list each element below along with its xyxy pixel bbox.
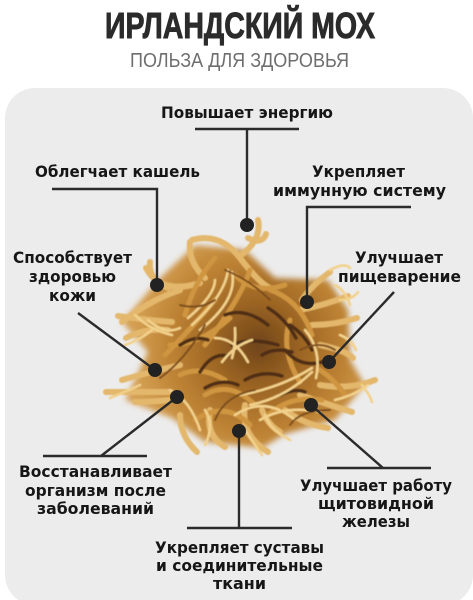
label: joints: и соединительные xyxy=(156,556,323,575)
label: thyroid xyxy=(300,398,453,531)
label: immune system xyxy=(273,162,447,309)
image: irish moss xyxy=(106,220,375,455)
label: skin: Способствует xyxy=(13,248,133,267)
label: skin: здоровью xyxy=(29,267,116,286)
label: thyroid: щитовидной xyxy=(318,494,434,513)
label: joints: Укрепляет суставы xyxy=(155,538,324,557)
subtitle: ПОЛЬЗА ДЛЯ ЗДОРОВЬЯ xyxy=(130,50,349,72)
title: ИРЛАНДСКИЙ МОХ xyxy=(105,4,375,46)
label: joints xyxy=(155,424,324,593)
label: skin xyxy=(13,248,162,377)
label: skin: кожи xyxy=(49,286,96,305)
label: joints: ткани xyxy=(213,574,266,593)
label: energy: Повышает энергию xyxy=(161,103,333,122)
label: cough: Облегчает кашель xyxy=(35,162,200,181)
label: cough xyxy=(35,162,200,292)
label: recovery xyxy=(19,390,184,518)
label: immune system: Укрепляет xyxy=(312,162,406,181)
label: digestion: пищеварение xyxy=(338,267,461,286)
label: digestion xyxy=(322,248,461,369)
label: recovery: Восстанавливает xyxy=(19,462,173,481)
label: digestion: Улучшает xyxy=(355,248,444,267)
label: energy xyxy=(161,103,333,232)
label: immune system: иммунную систему xyxy=(273,181,447,200)
label: recovery: организм после xyxy=(25,481,166,500)
label: recovery: заболеваний xyxy=(37,499,154,518)
label: thyroid: Улучшает работу xyxy=(300,476,453,495)
label: thyroid: железы xyxy=(342,512,410,531)
